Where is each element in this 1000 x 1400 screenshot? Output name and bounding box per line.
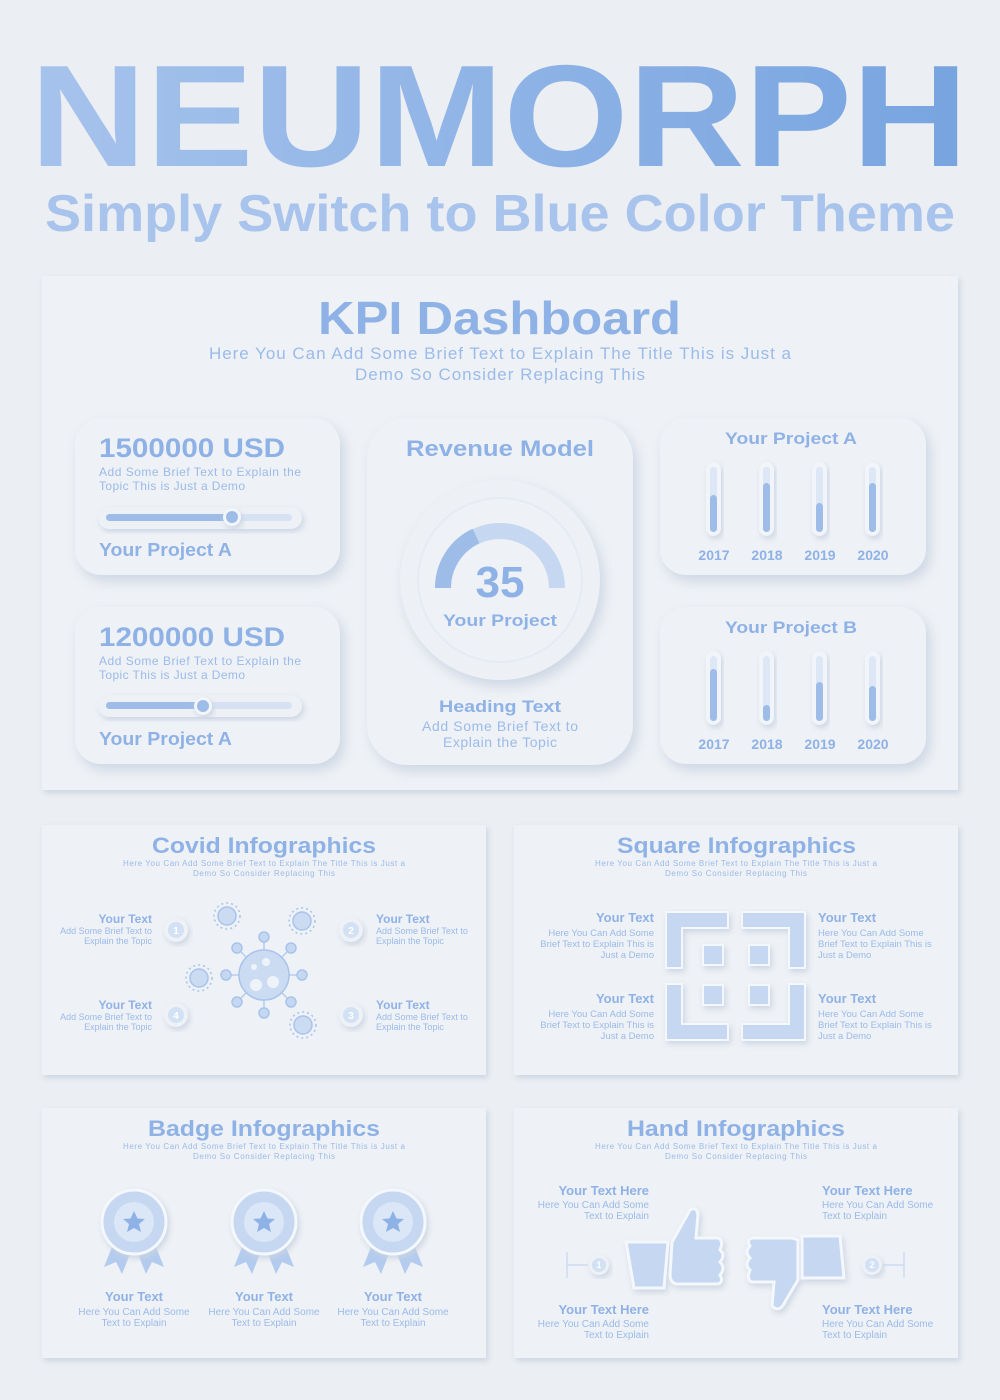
panel: badge infographics: Your Text xyxy=(105,1289,164,1304)
panel: badge infographics: Your Text xyxy=(364,1289,423,1304)
panel: hand infographics xyxy=(514,1108,958,1358)
covid texts: Explain the Topic xyxy=(376,1022,444,1032)
card: project B bars: 2020 xyxy=(857,736,889,752)
covid texts: Add Some Brief Text to xyxy=(376,926,468,936)
card: project B bars: Your Project B xyxy=(725,618,857,637)
panel: covid infographics: Demo So Consider Replacing This xyxy=(193,869,335,878)
card: revenue model gauge: Revenue Model xyxy=(406,436,594,461)
icon: virus xyxy=(186,903,316,1038)
card: project B bars: 2017 xyxy=(698,736,730,752)
panel: hand infographics: Text to Explain xyxy=(584,1211,649,1222)
card: 1200000 USD: 1200000 USD xyxy=(99,622,285,652)
panel: square infographics: Here You Can Add Some xyxy=(818,928,924,939)
panel: badge infographics: Here You Can Add Some xyxy=(78,1307,190,1318)
covid texts: Your Text xyxy=(376,998,430,1012)
panel: square infographics: Brief Text to Explain This is xyxy=(818,939,932,950)
panel: hand infographics: Text to Explain xyxy=(822,1330,887,1341)
covid texts: Explain the Topic xyxy=(84,1022,152,1032)
markers 1 and 2: 2 xyxy=(869,1260,875,1270)
panel: square infographics: Brief Text to Explain This is xyxy=(540,1020,654,1031)
card: 1500000 USD xyxy=(75,418,340,575)
subtitle: Simply Switch to Blue Color Theme xyxy=(45,185,955,243)
panel: hand infographics: Text to Explain xyxy=(584,1330,649,1341)
panel: hand infographics: Your Text Here xyxy=(558,1302,649,1317)
card: project A bars: 2019 xyxy=(804,547,836,563)
KPI subtitle: Demo So Consider Replacing This xyxy=(355,365,645,384)
panel: covid infographics: Covid Infographics xyxy=(152,833,376,858)
card: project A bars: 2018 xyxy=(751,547,783,563)
panel: square infographics: Demo So Consider Replacing This xyxy=(665,869,807,878)
card: project A bars xyxy=(660,418,926,575)
card: revenue model gauge: Heading Text xyxy=(439,697,561,716)
icon: thumbs up xyxy=(626,1209,723,1288)
panel: hand infographics: Here You Can Add Some xyxy=(538,1319,649,1330)
card: 1200000 USD: Add Some Brief Text to Explain the xyxy=(99,654,301,668)
badges xyxy=(102,1190,425,1274)
panel: square infographics: Just a Demo xyxy=(601,1031,654,1042)
card: revenue model gauge: Your Project xyxy=(443,611,557,630)
panel: square infographics: Here You Can Add Some Brief Text to Explain The Title This is Just a xyxy=(595,859,878,868)
panel: badge infographics: Here You Can Add Some xyxy=(208,1307,320,1318)
icon: square brackets xyxy=(666,912,805,1040)
number circles: 2 xyxy=(348,926,354,937)
covid texts: Explain the Topic xyxy=(376,936,444,946)
panel: hand infographics: Here You Can Add Some Brief Text to Explain The Title This is Just a xyxy=(595,1142,878,1151)
panel: square infographics: Brief Text to Explain This is xyxy=(540,939,654,950)
card: revenue model gauge: 35 xyxy=(476,558,524,607)
number circles: 4 xyxy=(173,1011,179,1022)
panel: square infographics: Your Text xyxy=(596,910,655,925)
card: 1200000 USD xyxy=(75,607,340,764)
panel: square infographics: Your Text xyxy=(818,991,877,1006)
markers 1 and 2 xyxy=(567,1252,904,1278)
panel: covid infographics xyxy=(42,825,486,1075)
icon: thumbs down xyxy=(747,1236,844,1309)
KPI subtitle xyxy=(209,344,792,384)
covid texts: Add Some Brief Text to xyxy=(60,1012,152,1022)
panel: badge infographics: Here You Can Add Some xyxy=(337,1307,449,1318)
title: NEUMORPH xyxy=(30,35,968,197)
panel: square infographics xyxy=(514,825,958,1075)
card: 1500000 USD: Topic This is Just a Demo xyxy=(99,479,245,493)
covid texts: Your Text xyxy=(376,912,430,926)
panel: badge infographics xyxy=(42,1108,486,1358)
panel: square infographics: Your Text xyxy=(818,910,877,925)
panel: badge infographics: Text to Explain xyxy=(231,1318,297,1329)
panel: hand infographics: Here You Can Add Some xyxy=(538,1200,649,1211)
panel: hand infographics: Here You Can Add Some xyxy=(822,1319,934,1330)
number circles: 3 xyxy=(348,1011,354,1022)
panel: badge infographics: Badge Infographics xyxy=(148,1116,380,1141)
number circles xyxy=(164,918,363,1027)
card: 1500000 USD: 1500000 USD xyxy=(99,433,285,463)
covid texts: Your Text xyxy=(98,998,152,1012)
panel: KPI dashboard xyxy=(42,276,958,790)
card: project A bars: 2020 xyxy=(857,547,889,563)
number circles: 1 xyxy=(173,926,179,937)
panel: square infographics: Square Infographics xyxy=(617,833,856,858)
panel: hand infographics: Hand Infographics xyxy=(627,1116,845,1141)
card: project B bars: 2018 xyxy=(751,736,783,752)
card: revenue model gauge xyxy=(367,418,633,765)
card: project B bars: 2019 xyxy=(804,736,836,752)
panel: hand infographics: Here You Can Add Some xyxy=(822,1200,934,1211)
panel: badge infographics: Here You Can Add Some Brief Text to Explain The Title This is Just a xyxy=(123,1142,406,1151)
covid texts: Add Some Brief Text to xyxy=(60,926,152,936)
panel: square infographics: Here You Can Add Some xyxy=(548,1009,654,1020)
panel: square infographics: Here You Can Add Some xyxy=(818,1009,924,1020)
panel: square infographics: Your Text xyxy=(596,991,655,1006)
covid texts: Your Text xyxy=(98,912,152,926)
panel: hand infographics: Your Text Here xyxy=(822,1183,913,1198)
panel: square infographics: Just a Demo xyxy=(601,950,654,961)
card: project A bars: Your Project A xyxy=(725,429,857,448)
card: 1200000 USD: Topic This is Just a Demo xyxy=(99,668,245,682)
card: project B bars xyxy=(660,607,926,764)
KPI heading: KPI Dashboard xyxy=(318,292,681,344)
panel: badge infographics: Your Text xyxy=(235,1289,294,1304)
KPI subtitle: Here You Can Add Some Brief Text to Explain The Title This is Just a xyxy=(209,344,792,363)
covid texts xyxy=(60,912,468,1032)
panel: square infographics: Brief Text to Explain This is xyxy=(818,1020,932,1031)
panel: covid infographics: Here You Can Add Some Brief Text to Explain The Title This is Just a xyxy=(123,859,406,868)
panel: hand infographics: Demo So Consider Replacing This xyxy=(665,1152,807,1161)
panel: hand infographics: Your Text Here xyxy=(558,1183,649,1198)
covid texts: Add Some Brief Text to xyxy=(376,1012,468,1022)
panel: badge infographics: Text to Explain xyxy=(360,1318,426,1329)
card: project A bars: 2017 xyxy=(698,547,730,563)
card: 1500000 USD: Your Project A xyxy=(99,540,232,560)
card: revenue model gauge: Add Some Brief Text to xyxy=(422,718,578,734)
card: 1200000 USD: Your Project A xyxy=(99,729,232,749)
covid texts: Explain the Topic xyxy=(84,936,152,946)
panel: badge infographics: Demo So Consider Replacing This xyxy=(193,1152,335,1161)
panel: badge infographics: Text to Explain xyxy=(101,1318,167,1329)
panel: square infographics: Just a Demo xyxy=(818,950,871,961)
panel: hand infographics: Your Text Here xyxy=(822,1302,913,1317)
card: revenue model gauge: Explain the Topic xyxy=(443,734,557,750)
card: 1500000 USD: Add Some Brief Text to Explain the xyxy=(99,465,301,479)
panel: square infographics: Just a Demo xyxy=(818,1031,871,1042)
panel: square infographics: Here You Can Add Some xyxy=(548,928,654,939)
markers 1 and 2: 1 xyxy=(596,1260,602,1270)
panel: hand infographics: Text to Explain xyxy=(822,1211,887,1222)
